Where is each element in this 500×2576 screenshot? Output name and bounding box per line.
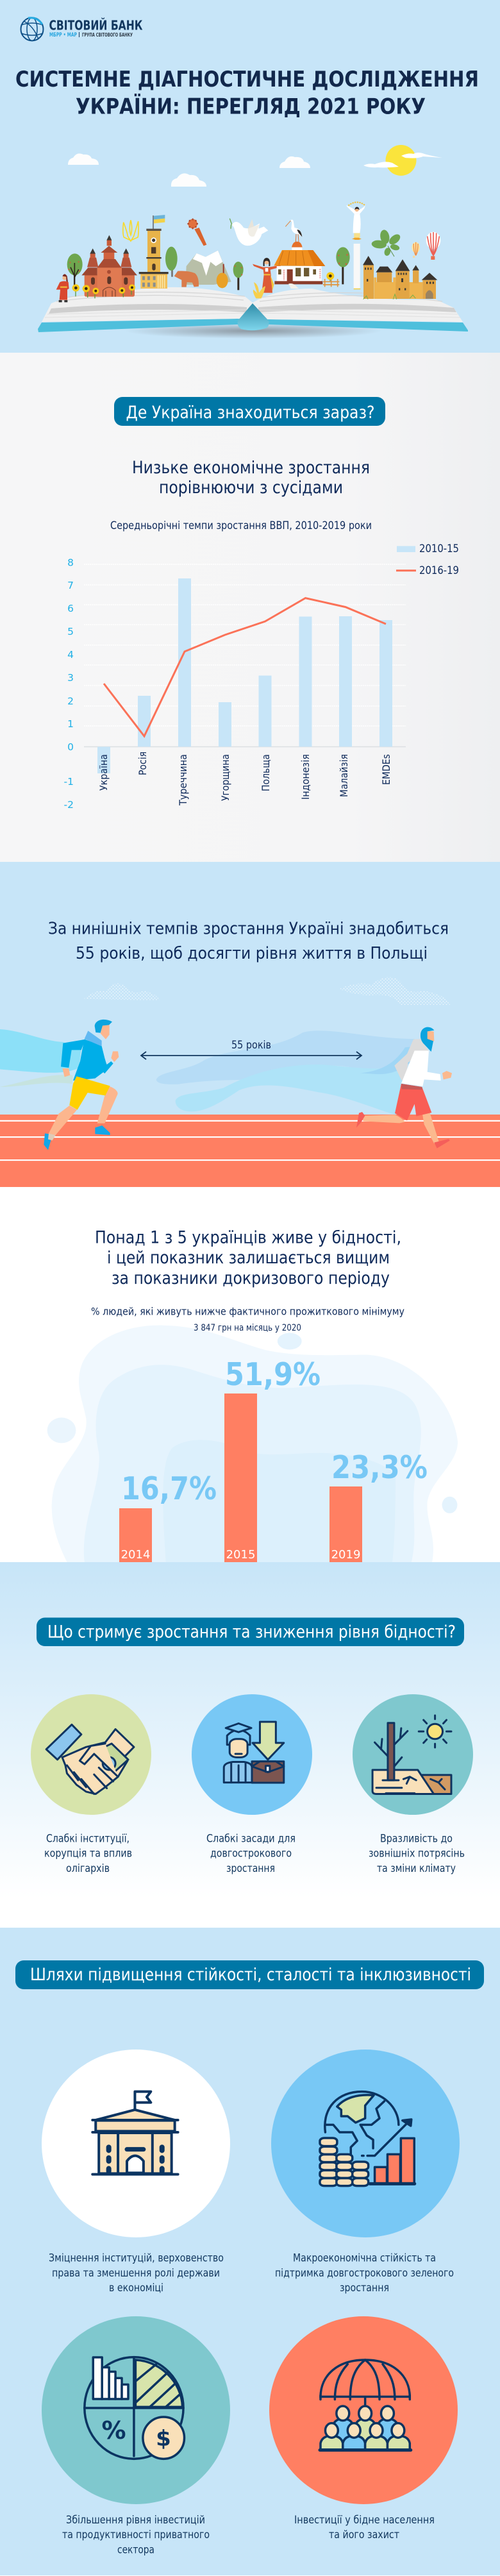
caption: зростання xyxy=(340,2282,389,2294)
caption: зовнішніх потрясінь xyxy=(369,1848,465,1860)
chart: GDP growth: Туреччина xyxy=(177,754,189,806)
goose xyxy=(288,283,299,289)
section heading: Низьке економічне зростання xyxy=(132,458,370,478)
title: УКРАЇНИ: ПЕРЕГЛЯД 2021 РОКУ xyxy=(76,94,426,119)
caption: Інвестиції у бідне населення xyxy=(294,2514,435,2527)
background blobs xyxy=(47,1326,458,1562)
logo: World Bank xyxy=(21,18,143,41)
trident xyxy=(123,220,138,241)
poverty subtitle: % людей, які живуть нижче фактичного прожиткового мінімуму xyxy=(91,1306,404,1318)
logo: World Bank: СВІТОВИЙ БАНК xyxy=(49,18,143,33)
illustration: right landmarks xyxy=(229,202,440,299)
caption: та продуктивності приватного xyxy=(62,2529,210,2541)
title xyxy=(15,67,479,119)
track xyxy=(0,1115,500,1187)
bar chart: poverty rate: 23,3% xyxy=(331,1449,428,1486)
heading pill: pathways xyxy=(15,1960,484,1989)
caption: Вразливість до xyxy=(380,1833,453,1846)
mace xyxy=(187,219,206,246)
bar chart: poverty rate: 2015 xyxy=(226,1548,255,1562)
chart: GDP growth: 8 xyxy=(67,557,74,568)
icon: handshake xyxy=(46,1724,134,1794)
caption: та його захист xyxy=(329,2529,399,2541)
tower with flag xyxy=(139,215,169,289)
icon: drought xyxy=(372,1715,451,1794)
person in red xyxy=(56,274,69,302)
mountains xyxy=(185,251,231,285)
caption: в економіці xyxy=(109,2282,163,2294)
card: macro stability xyxy=(271,2050,460,2294)
hot air balloons xyxy=(412,232,440,260)
caption: сектора xyxy=(117,2544,154,2557)
poverty subtitle: 3 847 грн на місяць у 2020 xyxy=(194,1323,301,1333)
fence and sunflower xyxy=(323,272,339,287)
sunflowers xyxy=(72,284,135,298)
bandura xyxy=(217,264,228,288)
panel: growth comparison xyxy=(0,353,500,862)
card: weak foundations xyxy=(192,1694,312,1875)
heading pill: where is Ukraine: Де Україна знаходиться зараз? xyxy=(126,403,374,423)
church xyxy=(81,235,137,297)
chart: GDP growth: Польща xyxy=(260,754,272,791)
chart: GDP growth: Росія xyxy=(137,752,149,775)
icon: pie chart with bars and dollar: % xyxy=(101,2416,126,2445)
chart: GDP growth: Україна xyxy=(97,754,110,791)
heading pill: where is Ukraine xyxy=(114,397,385,426)
caption xyxy=(49,2252,224,2294)
caption: Слабкі інституції, xyxy=(46,1833,129,1846)
caption: олігархів xyxy=(66,1862,110,1875)
chart: GDP growth: -2 xyxy=(64,799,74,811)
chart: GDP growth: Угорщина xyxy=(219,754,231,801)
chart: GDP growth: Малайзія xyxy=(338,754,350,797)
poverty heading: Понад 1 з 5 українців живе у бідності, xyxy=(95,1227,401,1248)
castle xyxy=(363,256,437,299)
runner: Ukraine xyxy=(0,1020,119,1150)
chart legend: 2010-15 xyxy=(419,543,459,555)
caption: права та зменшення ролі держави xyxy=(52,2267,220,2280)
caption xyxy=(275,2252,454,2294)
caption: довгострокового xyxy=(210,1848,292,1860)
chart: GDP growth: Індонезія xyxy=(299,754,312,800)
caption: Макроекономічна стійкість та xyxy=(293,2252,436,2265)
poverty subtitle xyxy=(91,1306,404,1333)
panel: pathways xyxy=(0,1928,500,2575)
chart title: Середньорічні темпи зростання ВВП, 2010-2019 роки xyxy=(110,519,372,532)
panel: constraints xyxy=(0,1562,500,1928)
house xyxy=(274,242,325,284)
independence column xyxy=(346,202,365,289)
tree xyxy=(165,247,178,277)
yellow plant xyxy=(253,282,265,298)
caption: зростання xyxy=(226,1862,275,1875)
clouds and sun xyxy=(68,145,442,187)
chart: GDP growth xyxy=(64,557,406,811)
statement: 55 років, щоб досягти рівня життя в Польщі xyxy=(76,944,428,963)
logo: World Bank: МБРР • МАР xyxy=(49,32,77,38)
tree xyxy=(233,262,244,290)
caption: та зміни клімату xyxy=(377,1862,456,1875)
card: private investment xyxy=(42,2316,230,2557)
dove xyxy=(229,219,268,246)
icon: government building xyxy=(92,2092,178,2175)
chart legend: 2016-19 xyxy=(419,564,459,577)
double arrow: 55 years xyxy=(141,1039,362,1059)
bar chart: poverty rate: 51,9% xyxy=(225,1356,321,1393)
poverty heading: за показники докризового періоду xyxy=(112,1268,390,1288)
tree xyxy=(67,253,83,285)
stork xyxy=(285,220,302,242)
caption xyxy=(369,1833,465,1875)
panel: header xyxy=(0,0,500,353)
chart: GDP growth: 6 xyxy=(67,603,74,614)
chart: GDP growth: 5 xyxy=(67,626,74,637)
statement: За нинішніх темпів зростання Україні знадобиться xyxy=(48,920,449,939)
icon: umbrella over people xyxy=(320,2360,411,2450)
caption: Збільшення рівня інвестицій xyxy=(66,2514,205,2527)
caption xyxy=(206,1833,296,1875)
poverty heading: і цей показник залишається вищим xyxy=(107,1248,390,1268)
panel: 55 years race xyxy=(0,862,500,1187)
caption: корупція та вплив xyxy=(44,1848,132,1860)
poverty heading xyxy=(95,1227,401,1288)
bar chart: poverty rate: 16,7% xyxy=(121,1470,217,1507)
dotted clouds xyxy=(83,977,450,1005)
chart: GDP growth: 4 xyxy=(67,649,74,661)
double arrow: 55 years: 55 років xyxy=(231,1039,271,1052)
card: vulnerability xyxy=(353,1694,473,1875)
caption: підтримка довгострокового зеленого xyxy=(275,2267,454,2280)
icon: pie chart with bars and dollar xyxy=(85,2357,185,2459)
chart: GDP growth: 7 xyxy=(67,580,74,591)
card: social protection xyxy=(269,2316,458,2541)
chart legend xyxy=(396,543,459,577)
chart: GDP growth: 3 xyxy=(67,672,74,684)
icon: pie chart with bars and dollar: $ xyxy=(156,2426,171,2452)
caption xyxy=(62,2514,210,2557)
section heading xyxy=(132,458,370,498)
caption xyxy=(44,1833,132,1875)
tree xyxy=(336,247,350,284)
illustration: open book xyxy=(38,287,468,339)
caption: Слабкі засади для xyxy=(206,1833,296,1846)
woman in embroidered dress xyxy=(253,258,281,293)
bar chart: poverty rate: 2019 xyxy=(331,1548,360,1562)
icon: globe, coins and growth bars xyxy=(320,2092,415,2186)
icon: graduate and briefcase xyxy=(224,1722,284,1783)
chart: GDP growth: 2 xyxy=(67,695,74,707)
panel: poverty xyxy=(0,1187,500,1562)
chart: GDP growth: 1 xyxy=(67,718,74,730)
heading pill: constraints xyxy=(37,1617,464,1646)
flowing waves xyxy=(156,1031,424,1115)
caption: Зміцнення інституцій, верховенство xyxy=(49,2252,224,2265)
chart: GDP growth: -1 xyxy=(64,776,74,787)
section heading: порівнюючи з сусідами xyxy=(159,478,343,498)
bar chart: poverty rate xyxy=(119,1356,428,1562)
logo: World Bank: ГРУПА СВІТОВОГО БАНКУ xyxy=(82,32,133,38)
caption xyxy=(294,2514,435,2541)
illustration: left landmarks xyxy=(56,215,244,302)
chart: GDP growth: EMDEs xyxy=(380,754,392,785)
bear xyxy=(174,271,199,287)
chart: GDP growth: 0 xyxy=(67,741,74,753)
bar chart: poverty rate: 2014 xyxy=(121,1548,150,1562)
runner: Poland xyxy=(356,1027,452,1149)
statement xyxy=(48,920,449,963)
chestnut leaf xyxy=(371,229,402,257)
card: institutions xyxy=(42,2050,230,2294)
card: weak institutions xyxy=(31,1694,151,1875)
